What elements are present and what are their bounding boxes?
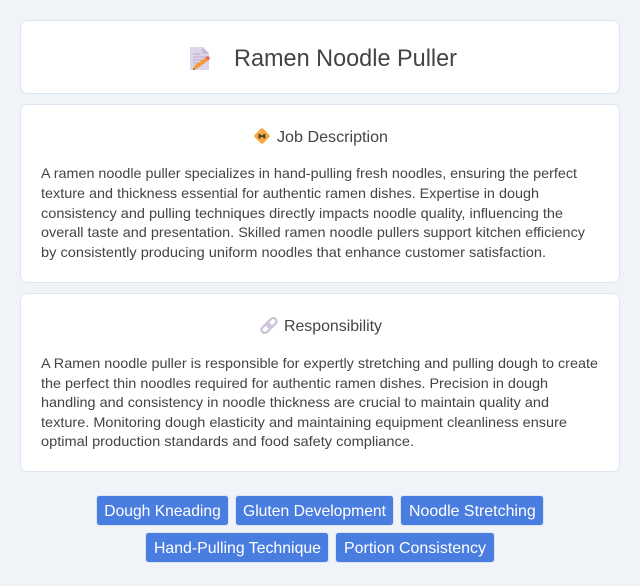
text block: responsibility <box>41 355 598 449</box>
panel: title card <box>20 20 620 94</box>
text block: responsibility: texture. Monitoring dough elasticity and maintaining equipment cleanliness ensure <box>41 414 567 430</box>
tags: skills <box>96 496 544 562</box>
text block: job description: texture and thickness essential for authentic ramen dishes. Expertise in dough <box>41 185 539 201</box>
icon: chain link <box>260 317 278 334</box>
tag: noodle stretching: Noodle Stretching <box>409 503 536 520</box>
tag: gluten development <box>236 496 394 526</box>
panel: job description <box>20 104 620 282</box>
text block: job description <box>41 165 585 260</box>
panel: responsibility <box>20 294 620 472</box>
tag: hand-pulling technique <box>146 532 328 562</box>
text block: job description: consistency and pulling techniques directly impacts noodle quality, influencing the <box>41 205 563 221</box>
text block: job description: overall taste and presentation. Skilled ramen noodle pullers support kitchen efficiency <box>41 224 585 240</box>
tag: portion consistency: Portion Consistency <box>344 540 486 557</box>
heading: responsibility: Responsibility <box>284 318 382 335</box>
tag: noodle stretching <box>400 496 544 526</box>
text block: responsibility: handling and consistency in noodle thickness are crucial to maintain quality and <box>41 394 549 410</box>
text block: job description: A ramen noodle puller specializes in hand-pulling fresh noodles, ensuring the perfect <box>41 165 577 181</box>
heading: job description: Job Description <box>277 129 388 146</box>
icon: document with pencil <box>190 47 210 70</box>
text block: responsibility: the perfect thin noodles required for authentic ramen dishes. Precision in dough <box>41 375 548 391</box>
tag: hand-pulling technique: Hand-Pulling Technique <box>154 540 321 557</box>
tag: dough kneading <box>96 496 228 526</box>
tag: portion consistency <box>336 532 494 562</box>
title: Ramen Noodle Puller <box>234 45 457 72</box>
text block: responsibility: optimal production standards and food safety compliance. <box>41 433 414 449</box>
tag: gluten development: Gluten Development <box>243 503 387 520</box>
tag: dough kneading: Dough Kneading <box>104 503 221 520</box>
icon: orange diamond <box>254 128 270 144</box>
text block: job description: by consistently producing uniform noodles that enhance customer satisfaction. <box>41 244 546 260</box>
text block: responsibility: A Ramen noodle puller is responsible for expertly stretching and pulling dough to create <box>41 355 598 371</box>
